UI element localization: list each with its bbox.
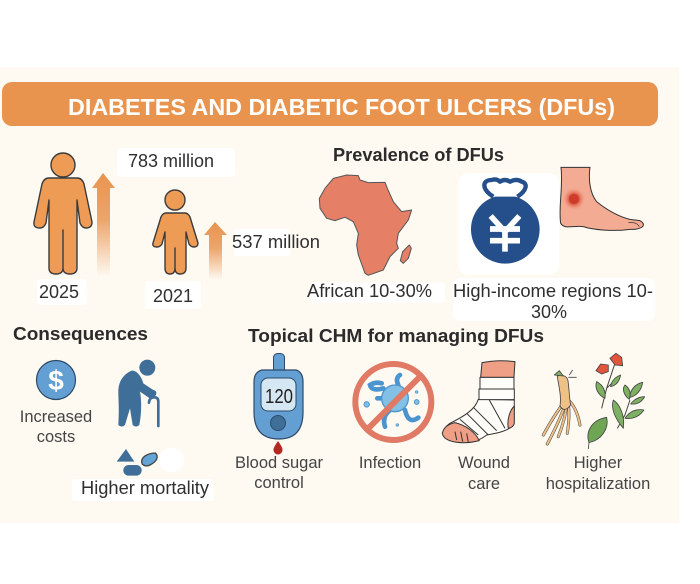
icon: person 2021 bbox=[153, 190, 198, 274]
label: blood sugar control bbox=[235, 454, 324, 492]
label: wound care: care bbox=[468, 475, 500, 493]
label: high-income prevalence: High-income regions 10- bbox=[453, 281, 653, 301]
icon: bandaged foot bbox=[442, 361, 515, 443]
label: higher mortality: Higher mortality bbox=[81, 478, 209, 498]
label: blood sugar control: Blood sugar bbox=[235, 454, 324, 472]
label: 2021 bbox=[145, 281, 201, 309]
icon: dollar coin bbox=[36, 360, 76, 400]
label: increased costs: costs bbox=[37, 428, 75, 446]
label: 2025: 2025 bbox=[39, 282, 79, 302]
label: 537 million: 537 million bbox=[232, 232, 320, 252]
icon: glucose meter bbox=[254, 354, 303, 454]
label: higher hospitalization: hospitalization bbox=[546, 475, 650, 493]
title banner: DIABETES AND DIABETIC FOOT ULCERS (DFUs) bbox=[68, 94, 615, 120]
label: high-income prevalence bbox=[453, 278, 655, 322]
label: blood sugar control: control bbox=[254, 474, 304, 492]
label: wound care bbox=[458, 454, 510, 493]
icon: Africa map bbox=[319, 175, 412, 275]
label: higher hospitalization: Higher bbox=[574, 454, 623, 472]
label: 2025 bbox=[37, 279, 87, 305]
label: 783 million: 783 million bbox=[128, 151, 214, 171]
label: African prevalence: African 10-30% bbox=[307, 281, 432, 301]
icon: mortality symbols bbox=[117, 448, 184, 476]
label: increased costs bbox=[20, 408, 92, 446]
label: increased costs: Increased bbox=[20, 408, 92, 426]
label: infection: Infection bbox=[359, 454, 421, 472]
icon: medicinal herbs bbox=[543, 353, 645, 449]
label: high-income prevalence: 30% bbox=[531, 302, 567, 322]
icon: elderly person with cane bbox=[118, 360, 158, 427]
label: wound care: Wound bbox=[458, 454, 510, 472]
icon: no infection bbox=[355, 364, 431, 440]
label: higher hospitalization bbox=[546, 454, 650, 493]
icon: dollar coin: $ bbox=[48, 365, 64, 396]
arrow: 2025 growth bbox=[92, 173, 115, 277]
icon: yen money bag bbox=[458, 173, 559, 275]
heading: consequences: Consequences bbox=[13, 324, 148, 344]
page background panel bbox=[0, 67, 679, 523]
arrow: 2021 growth bbox=[204, 222, 227, 280]
heading: topical CHM: Topical CHM for managing DFUs bbox=[248, 325, 544, 346]
label: 783 million bbox=[117, 148, 235, 177]
heading: prevalence: Prevalence of DFUs bbox=[333, 145, 504, 165]
icon: foot with ulcer bbox=[560, 167, 643, 230]
title banner bbox=[2, 82, 658, 126]
icon: glucose meter: 120 bbox=[265, 386, 293, 408]
label: 2021: 2021 bbox=[153, 286, 193, 306]
icon: person 2025 bbox=[34, 153, 92, 274]
